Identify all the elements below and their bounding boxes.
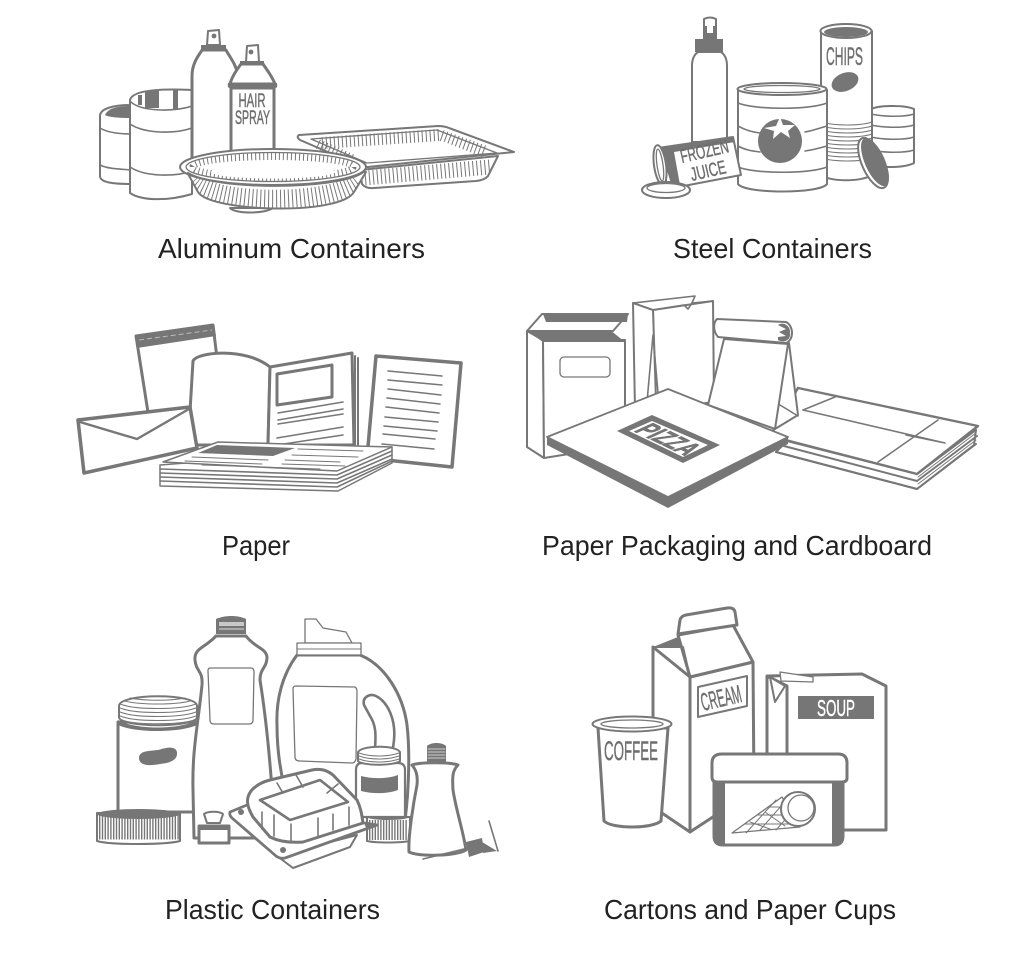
heading: paper: Paper bbox=[222, 530, 290, 561]
chips canister bbox=[820, 24, 872, 180]
envelope bbox=[78, 407, 197, 473]
open book bbox=[188, 353, 358, 445]
panel: cartons and paper cups illustration bbox=[592, 608, 886, 845]
paper bag bbox=[633, 296, 714, 410]
clamshell food container bbox=[230, 769, 377, 868]
hair spray can bbox=[228, 45, 277, 155]
loose jar lid bbox=[97, 809, 180, 844]
printed sheet bbox=[367, 356, 461, 467]
panel: paper illustration bbox=[78, 324, 461, 491]
hair spray can: HAIR bbox=[238, 91, 266, 112]
spray bottle bbox=[692, 18, 727, 142]
heading: cartons and paper cups: Cartons and Paper Cups bbox=[604, 894, 896, 925]
panel: steel containers illustration bbox=[642, 18, 914, 198]
coffee cup: COFFEE bbox=[604, 736, 658, 766]
back lid bbox=[367, 814, 410, 842]
tall aerosol can bbox=[192, 30, 238, 170]
chips canister: CHIPS bbox=[826, 43, 863, 71]
tomato can bbox=[738, 83, 827, 192]
small aluminum can bbox=[100, 105, 132, 184]
flattened cardboard stack bbox=[770, 388, 978, 489]
panel: paper packaging and cardboard illustration bbox=[527, 296, 978, 508]
writing pad bbox=[135, 324, 222, 425]
pizza box bbox=[547, 389, 788, 508]
plastic jar bbox=[118, 696, 197, 812]
frozen juice can bbox=[651, 136, 741, 189]
frozen juice can: JUICE bbox=[688, 157, 728, 186]
round pie pan bbox=[180, 149, 366, 212]
pizza box: PIZZA bbox=[626, 420, 709, 459]
soup carton: SOUP bbox=[817, 695, 855, 721]
dark can lid bbox=[852, 134, 895, 192]
heading: plastic containers: Plastic Containers bbox=[165, 894, 380, 925]
small jar bbox=[356, 747, 405, 817]
newspaper stack bbox=[160, 442, 392, 491]
cereal box bbox=[527, 314, 628, 458]
flip-top cap bbox=[198, 812, 230, 843]
heading: paper packaging and cardboard: Paper Packaging and Cardboard bbox=[542, 530, 932, 561]
cream carton bbox=[653, 608, 754, 832]
panel: plastic containers illustration bbox=[97, 616, 498, 868]
small stacked can bbox=[871, 106, 914, 167]
cream carton: CREAM bbox=[698, 680, 744, 717]
standing bag with roll bbox=[708, 319, 798, 429]
panel: aluminum containers illustration bbox=[100, 30, 514, 212]
frozen juice can: FROZEN bbox=[678, 136, 731, 168]
rectangular foil tray bbox=[298, 126, 514, 188]
juice can lid bbox=[642, 182, 690, 198]
detergent jug bbox=[277, 619, 409, 820]
heading: steel containers: Steel Containers bbox=[673, 233, 872, 264]
soup carton bbox=[767, 672, 886, 830]
coffee cup bbox=[592, 716, 672, 827]
hair spray can: SPRAY bbox=[235, 108, 270, 129]
heading: aluminum containers: Aluminum Containers bbox=[158, 233, 425, 264]
ice cream tub bbox=[712, 754, 847, 845]
dish soap bottle bbox=[193, 616, 275, 838]
small condiment bottle bbox=[409, 743, 498, 859]
large aluminum can bbox=[130, 89, 192, 199]
